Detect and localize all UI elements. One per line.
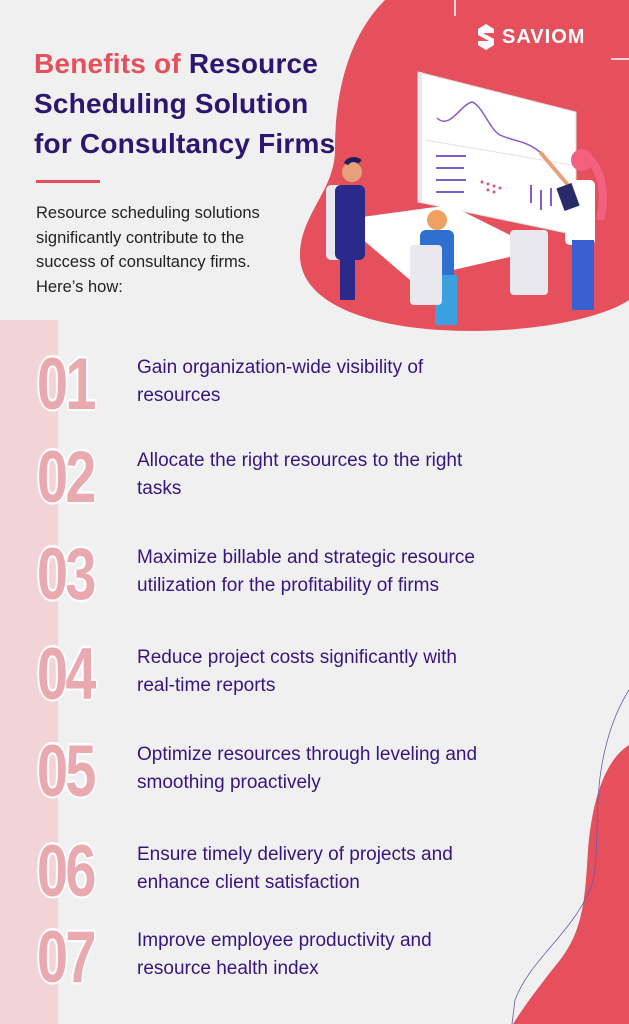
item 04 — [37, 634, 457, 715]
item 03: 03 — [37, 534, 94, 615]
intro text: Resource scheduling solutions — [36, 204, 260, 222]
item 03: Maximize billable and strategic resource — [137, 547, 475, 568]
title: for Consultancy Firms — [34, 128, 335, 159]
title: Benefits of Resource — [34, 48, 318, 79]
item 01: 01 — [37, 344, 94, 425]
item 01: resources — [137, 385, 220, 406]
item 04: Reduce project costs significantly with — [137, 647, 457, 668]
logo: saviom: SAVIOM — [502, 26, 585, 48]
item 05: Optimize resources through leveling and — [137, 744, 477, 765]
item 02: 02 — [37, 437, 94, 518]
item 06: enhance client satisfaction — [137, 872, 360, 893]
item 04: 04 — [37, 634, 94, 715]
item 02: Allocate the right resources to the right — [137, 450, 462, 471]
intro text: Here’s how: — [36, 278, 123, 296]
intro text: significantly contribute to the — [36, 228, 244, 246]
item 06: 06 — [37, 831, 94, 912]
item 03 — [37, 534, 475, 615]
item 07: Improve employee productivity and — [137, 930, 432, 951]
item 01: Gain organization-wide visibility of — [137, 357, 423, 378]
item 05: smoothing proactively — [137, 772, 321, 793]
item 05 — [37, 731, 477, 812]
intro text: success of consultancy firms. — [36, 253, 251, 271]
item 02: tasks — [137, 478, 181, 499]
item 02 — [37, 437, 462, 518]
illustration: team meeting with dashboard — [326, 71, 607, 325]
item 06: Ensure timely delivery of projects and — [137, 844, 453, 865]
item 05: 05 — [37, 731, 94, 812]
title — [34, 48, 335, 159]
intro text — [36, 204, 260, 296]
item 07: 07 — [37, 917, 94, 998]
item 07 — [37, 917, 432, 998]
item 07: resource health index — [137, 958, 319, 979]
title: Scheduling Solution — [34, 88, 308, 119]
item 04: real-time reports — [137, 675, 275, 696]
title underline — [36, 180, 100, 183]
logo: saviom — [478, 24, 585, 50]
item 01 — [37, 344, 424, 425]
item 06 — [37, 831, 453, 912]
item 03: utilization for the profitability of firms — [137, 575, 439, 596]
